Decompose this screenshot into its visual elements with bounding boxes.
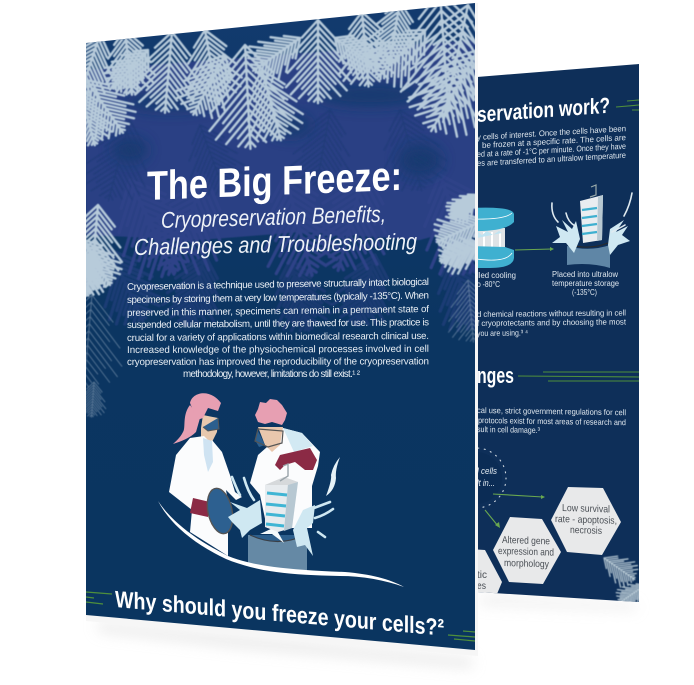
hexagon: apoptotic changes: tic: [477, 570, 487, 581]
green accent lines middle: [518, 372, 639, 381]
intro paragraph: crucial for a variety of applications within biomedical research clinical use.: [127, 331, 429, 344]
challenges text block: sult in cell damage.³: [477, 425, 540, 435]
middle text block: d chemical reactions without resulting in cell: [477, 309, 626, 319]
figure: female scientist: [169, 393, 242, 556]
navy texture fronds: [90, 110, 446, 198]
middle text block: you are using.³ ⁴: [477, 328, 528, 338]
intro text block: ed at a rate of -1°C per minute. Once they have: [477, 142, 626, 159]
dotted circle: frozen cells: [478, 448, 507, 508]
hexagon: apoptotic changes: [478, 550, 502, 594]
lid: [206, 488, 234, 534]
dotted circle: frozen cells: lt in...: [477, 478, 495, 489]
bright frost fronds at top: [86, 4, 475, 298]
icon: controlled cooling container: [478, 208, 514, 268]
hexagon: low survival: Low survival: [562, 503, 610, 515]
label: controlled cooling: lled cooling: [477, 270, 516, 280]
intro paragraph: Increased knowledge of the physiochemical processes involved in cell: [127, 344, 429, 356]
challenges text block: cal use, strict government regulations for cell: [477, 406, 626, 417]
middle text block: f cryoprotectants and by choosing the most: [477, 318, 627, 328]
label: placed into ultralow storage: temperature storage: [552, 278, 619, 288]
intro paragraph: methodology, however, limitations do still exist.¹ ²: [183, 369, 361, 380]
splash: [228, 500, 315, 556]
hexagon: low survival: [551, 487, 621, 555]
label: placed into ultralow storage: (-135°C): [572, 287, 597, 297]
illustration: scientists with rack and dewar: [158, 393, 404, 587]
back page panel: [478, 64, 639, 603]
intro text block: be frozen at a specific rate. The cells are: [482, 133, 626, 150]
streak: [326, 457, 340, 496]
arrow: cooling to storage: [515, 247, 554, 251]
hexagon: low survival: necrosis: [570, 525, 602, 537]
heading: how does cryopreservation work: servation work?: [477, 93, 610, 127]
dotted circle: frozen cells: l cells: [477, 466, 497, 477]
intro text block: y cells of interest. Once the cells have been: [477, 124, 626, 142]
hexagon: low survival: rate - apoptosis,: [555, 514, 617, 527]
heading: challenges: nges: [477, 363, 514, 388]
green accent lines bottom right: [448, 631, 475, 641]
subtitle: [135, 206, 417, 258]
hexagon: altered gene expression: morphology: [504, 558, 549, 570]
rack: [265, 464, 298, 532]
heading: why should you freeze your cells: Why should you freeze your cells?²: [115, 586, 444, 641]
intro paragraph: suspended cellular metabolism, until they are thawed for use. This practice is: [127, 317, 429, 331]
intro paragraph: specimens by storing them at very low temperatures (typically -135°C). When: [127, 290, 429, 306]
middle text block: [477, 309, 627, 338]
title: The Big Freeze:: [147, 153, 402, 209]
hexagon: altered gene expression: expression and: [498, 546, 554, 559]
label: placed into ultralow storage: [552, 269, 619, 297]
green accent lines top: [616, 100, 639, 110]
faint frost left and right edges: [86, 279, 475, 418]
dark frost background: [86, 40, 475, 332]
challenges text block: protocols exist for most areas of research and: [478, 416, 626, 427]
icon: rack in ultralow storage dewar: [552, 185, 632, 268]
hexagon: apoptotic changes: es: [477, 581, 486, 592]
intro paragraph: preserved in this manner, specimens can remain in a permanent state of: [127, 304, 429, 319]
intro paragraph: Cryopreservation is a technique used to preserve structurally intact biological: [127, 277, 429, 293]
arrow: to low survival: [493, 494, 545, 499]
green accent lines bottom left: [86, 592, 112, 604]
subtitle: Challenges and Troubleshooting: [134, 228, 417, 260]
arrow: to altered gene expression: [485, 510, 500, 528]
figure: male scientist: [250, 399, 320, 528]
dark navy gaps in frost: [112, 83, 442, 176]
front page panel: [86, 3, 478, 652]
intro paragraph: [127, 277, 429, 380]
hexagon: altered gene expression: Altered gene: [502, 535, 550, 547]
challenges text block: [477, 406, 626, 435]
label: controlled cooling: [478, 272, 516, 287]
intro text block: [477, 124, 626, 168]
intro text block: es are transferred to an ultralow temperature: [477, 151, 626, 168]
frost corner on back page: [602, 554, 639, 602]
dewar: [248, 535, 307, 571]
hexagon: altered gene expression: [493, 517, 561, 584]
intro paragraph: cryopreservation has improved the reproducibility of the cryopreservation: [127, 356, 429, 368]
white swoosh: [158, 501, 404, 587]
subtitle: Cryopreservation Benefits,: [161, 201, 386, 233]
label: placed into ultralow storage: Placed into ultralow: [552, 269, 619, 279]
drop shadow under front page: [95, 622, 472, 668]
label: controlled cooling: o -80°C: [477, 279, 500, 289]
